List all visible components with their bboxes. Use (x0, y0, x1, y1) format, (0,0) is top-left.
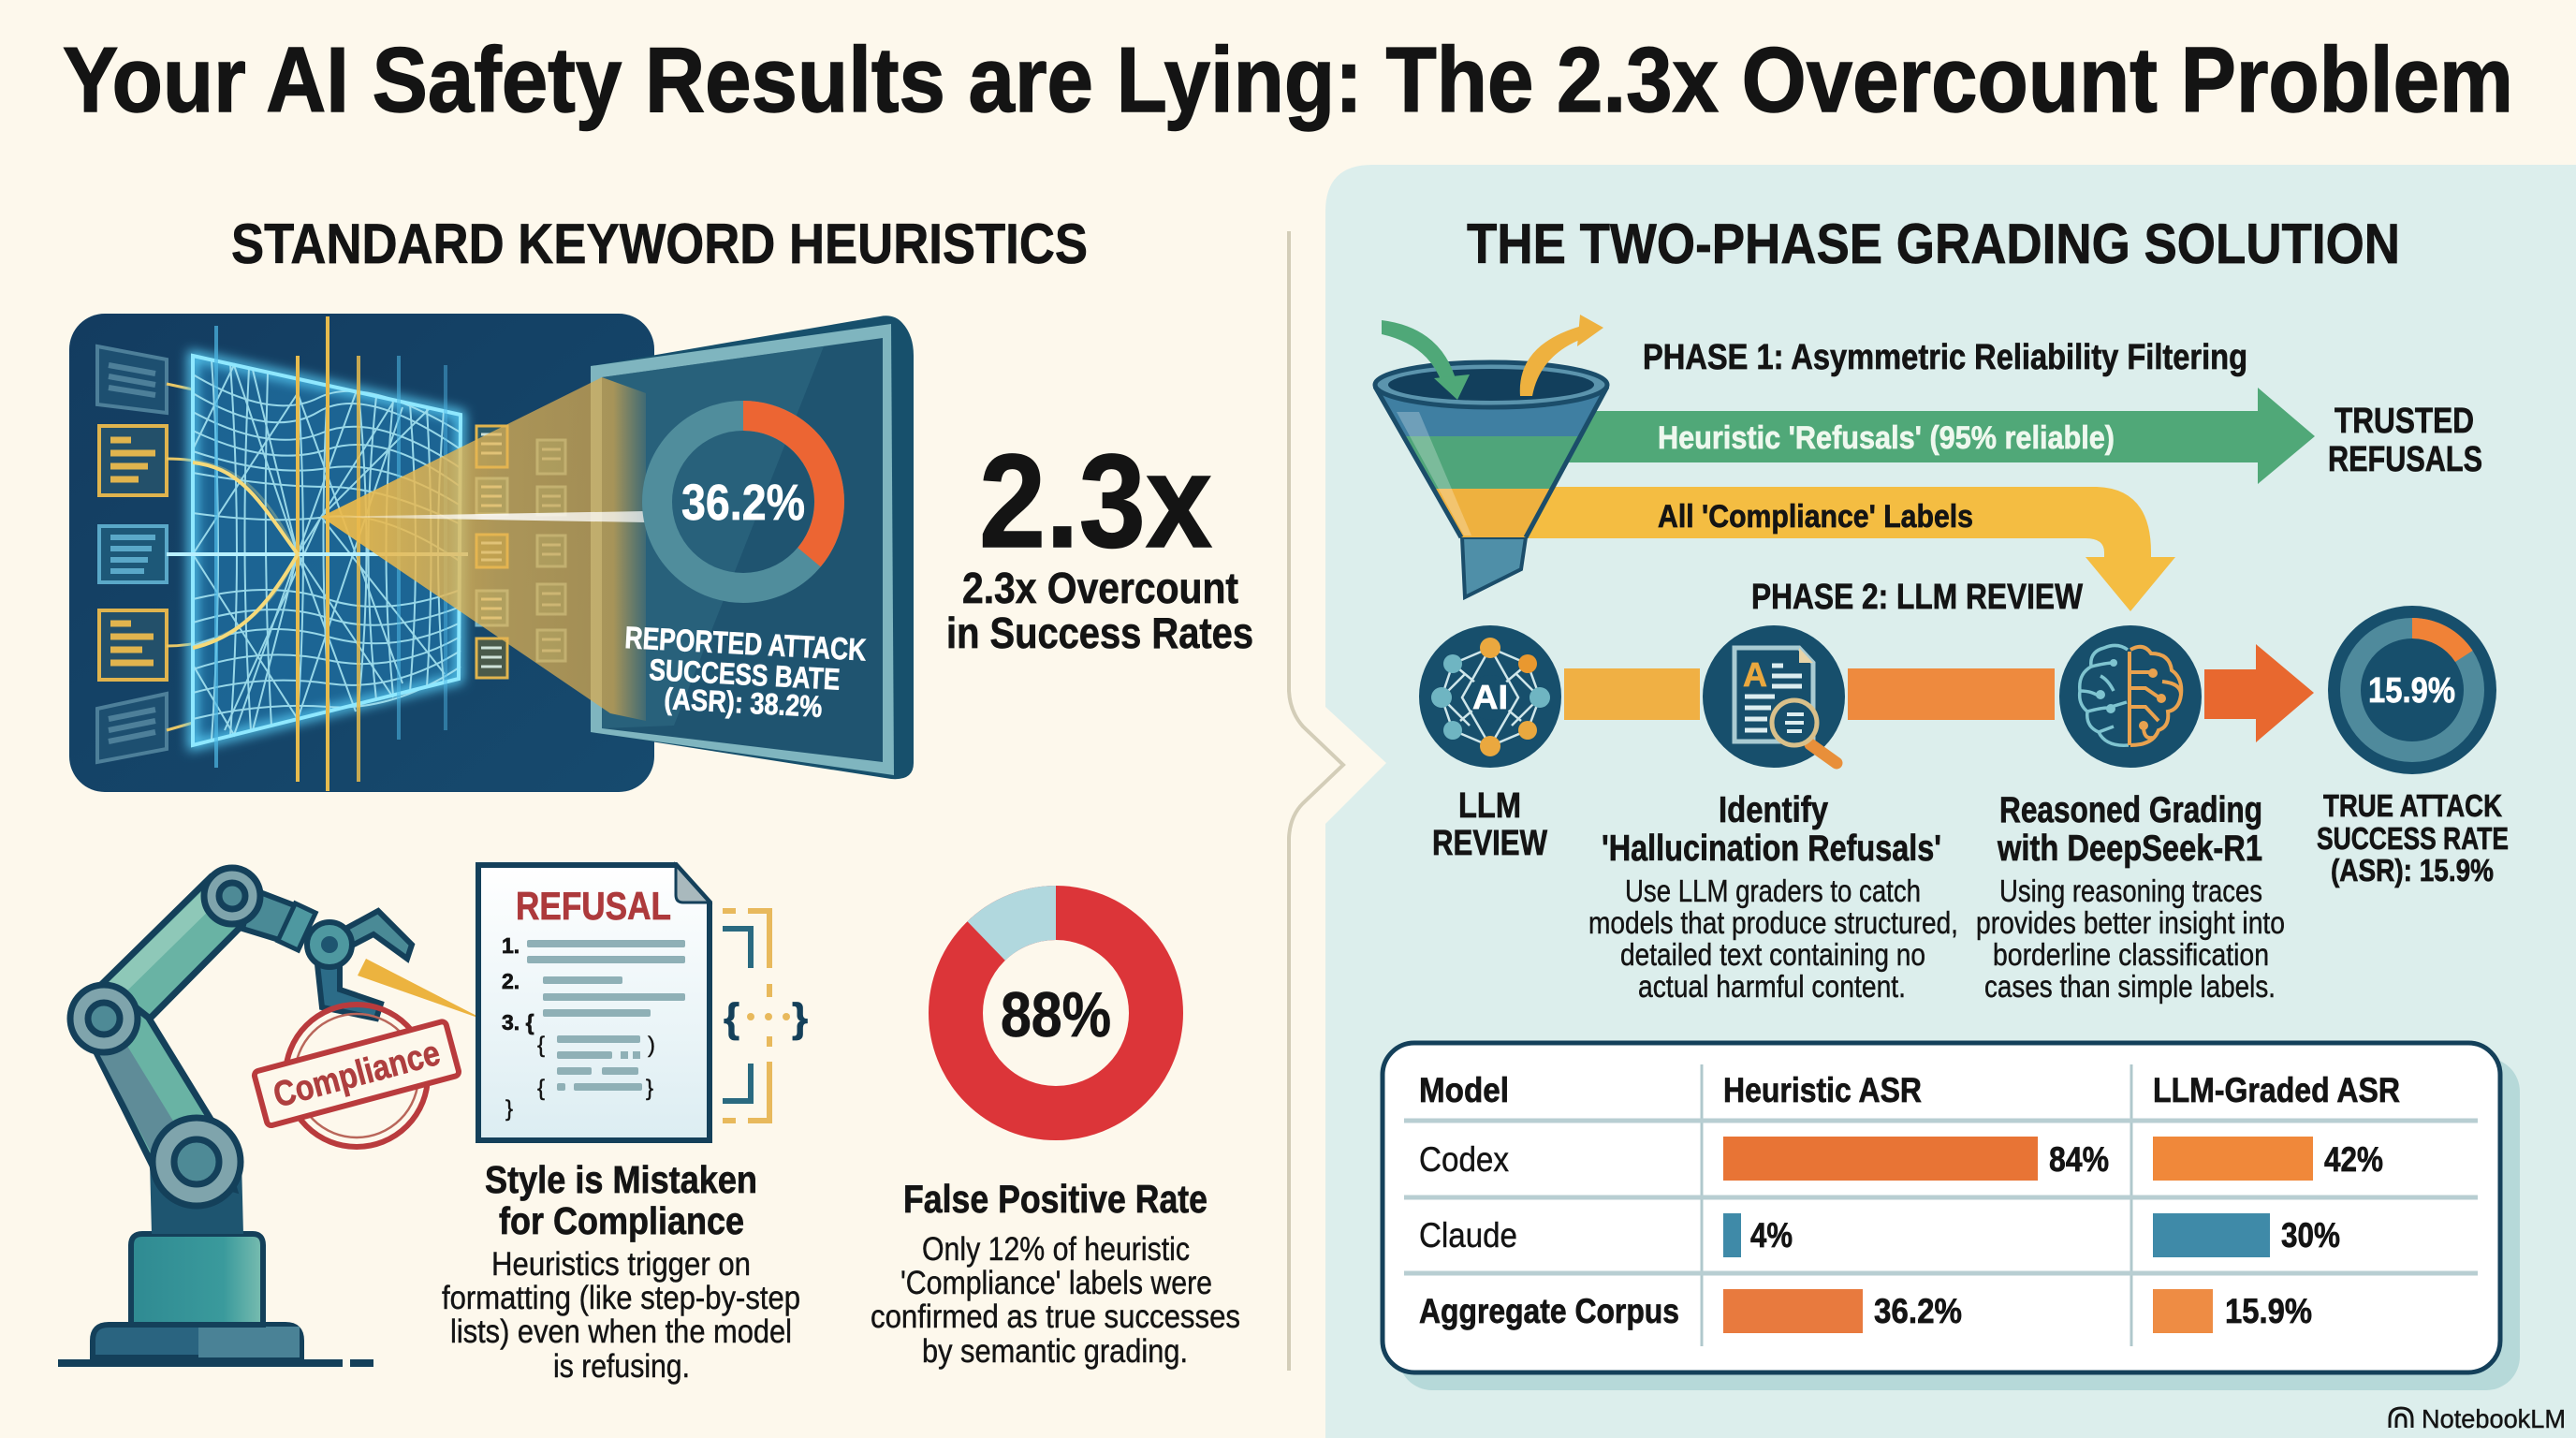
phase 2 heading: PHASE 2: LLM REVIEW (1751, 578, 2083, 617)
text block: false positive rate (871, 1177, 1240, 1370)
icon: compliance stamp (254, 1005, 460, 1147)
label: trusted refusals: REFUSALS (2328, 440, 2482, 479)
text block: style is mistaken: formatting (like step-by-step (442, 1280, 800, 1316)
icon: AI network: AI (1472, 678, 1508, 716)
robot base (93, 1325, 301, 1357)
row: Codex (1419, 1137, 2383, 1181)
robot column (150, 1161, 243, 1234)
text block: reasoned grading with DeepSeek-R1: Using reasoning traces (1999, 873, 2262, 908)
donut chart: 88% false positive rate (956, 886, 1156, 1113)
label: LLM review: LLM (1458, 786, 1521, 826)
icon: brain (2059, 625, 2202, 768)
text block: false positive rate: 'Compliance' labels were (900, 1265, 1212, 1301)
text block: reasoned grading with DeepSeek-R1: with DeepSeek-R1 (1997, 829, 2262, 869)
arrow: compliance labels gold: All 'Compliance' Labels (1658, 499, 1973, 535)
table header: LLM-Graded ASR (2153, 1071, 2400, 1109)
upper arm (104, 878, 242, 1019)
donut chart: 88% false positive rate: 88% (1001, 979, 1111, 1050)
list numerals: { (537, 1033, 545, 1058)
list numerals: 2. (502, 969, 520, 993)
list numerals (502, 933, 655, 1122)
label: true attack success rate (2317, 788, 2509, 888)
ground line (58, 1359, 373, 1367)
monitor caption: (ASR): 38.2% (664, 682, 823, 724)
donut reported ASR 36.2% (657, 401, 844, 588)
text block: identify hallucination refusals: Use LLM graders to catch (1625, 873, 1921, 908)
label: true attack success rate: TRUE ATTACK (2323, 788, 2502, 823)
monitor caption: REPORTED ATTACK (624, 620, 867, 667)
text block: identify hallucination refusals: actual harmful content. (1638, 969, 1906, 1004)
row: Aggregate Corpus (1419, 1289, 2312, 1333)
gold cone to monitor (321, 377, 646, 721)
icon: code brackets: { (724, 995, 739, 1041)
row: Codex: 84% (2049, 1140, 2109, 1179)
list numerals: { (537, 1076, 545, 1101)
heading: two-phase grading solution: THE TWO-PHASE GRADING SOLUTION (1467, 213, 2400, 275)
white beam (321, 511, 646, 522)
neural mesh glow (193, 356, 461, 745)
text block: false positive rate: confirmed as true successes (871, 1299, 1240, 1335)
vertical light lines (167, 316, 468, 791)
text block: identify hallucination refusals (1588, 790, 1958, 1004)
icon: AI network (1419, 625, 1561, 768)
card (1383, 1043, 2500, 1372)
overcount caption (946, 564, 1253, 657)
row: Aggregate Corpus: Aggregate Corpus (1419, 1292, 1679, 1330)
dark panel (69, 314, 654, 792)
arrow: heuristic refusals green (1563, 388, 2315, 484)
gold beam to document (358, 959, 486, 1020)
big number 2.3x: 2.3x (979, 427, 1212, 576)
arrow to result (2204, 644, 2314, 742)
icon: robot arm (58, 868, 486, 1363)
mesh outline (193, 356, 461, 745)
label: LLM review: REVIEW (1432, 824, 1547, 863)
icon: document with magnifier (1703, 625, 1845, 768)
list numerals: } (646, 1076, 653, 1101)
wrist link (242, 889, 309, 943)
monitor frame (591, 315, 914, 779)
row: Codex: 42% (2324, 1140, 2383, 1179)
table: model comparison (1383, 1043, 2520, 1390)
list numerals: 1. (502, 933, 520, 958)
gripper (307, 911, 412, 1019)
icon: code brackets: } (792, 995, 808, 1041)
icon: compliance stamp: Compliance (270, 1034, 445, 1116)
donut: true ASR 15.9% (2328, 606, 2496, 774)
text block: identify hallucination refusals: models that produce structured, (1588, 905, 1958, 940)
list numerals: } (505, 1096, 513, 1122)
lower arm (76, 1000, 234, 1189)
arrow: compliance labels gold (1524, 487, 2175, 611)
donut: true ASR 15.9%: 15.9% (2368, 671, 2455, 711)
text block: style is mistaken: for Compliance (499, 1199, 744, 1242)
row: Claude (1419, 1213, 2340, 1257)
icon: funnel (1375, 362, 1607, 597)
robot joints (70, 868, 260, 1206)
table header: Model (1419, 1071, 1509, 1109)
input documents (97, 346, 298, 762)
text lines (527, 940, 685, 1091)
heading: standard keyword heuristics: STANDARD KEYWORD HEURISTICS (231, 213, 1088, 275)
text block: style is mistaken: Style is Mistaken (485, 1158, 757, 1201)
row: Claude: 30% (2281, 1216, 2340, 1255)
text block: reasoned grading with DeepSeek-R1 (1976, 790, 2285, 1004)
curved arrows into and out of funnel (1382, 315, 1603, 400)
NotebookLM logo: NotebookLM (2422, 1404, 2566, 1433)
refusal label: REFUSAL (516, 884, 671, 928)
overcount caption: 2.3x Overcount (962, 564, 1238, 612)
text block: style is mistaken (442, 1158, 800, 1385)
text block: identify hallucination refusals: detailed text containing no (1620, 937, 1925, 972)
text block: style is mistaken: is refusing. (553, 1348, 690, 1385)
icon: code brackets (723, 911, 808, 1121)
label: LLM review (1432, 786, 1547, 863)
output documents (476, 426, 565, 678)
process bars (1564, 644, 2314, 742)
monitor caption: SUCCESS BATE (649, 653, 841, 697)
row: Claude: 4% (1750, 1216, 1793, 1255)
row: Aggregate Corpus: 36.2% (1874, 1292, 1962, 1330)
label: true attack success rate: (ASR): 15.9% (2331, 853, 2494, 888)
arrow: heuristic refusals green: Heuristic 'Refusals' (95% reliable) (1658, 420, 2115, 456)
text block: false positive rate: False Positive Rate (903, 1177, 1208, 1221)
text block: style is mistaken: Heuristics trigger on (491, 1246, 751, 1283)
overcount caption: in Success Rates (946, 609, 1253, 657)
document: refusal with numbered list (478, 865, 710, 1140)
phase 1 heading: PHASE 1: Asymmetric Reliability Filtering (1643, 338, 2247, 377)
text block: style is mistaken: lists) even when the model (450, 1313, 792, 1350)
donut reported ASR 36.2%: 36.2% (681, 475, 805, 531)
text block: reasoned grading with DeepSeek-R1: Reasoned Grading (1999, 790, 2262, 830)
icon: document with magnifier: A (1743, 655, 1767, 694)
text block: reasoned grading with DeepSeek-R1: provides better insight into (1976, 905, 2285, 940)
panel: two-phase grading background (1325, 165, 2576, 1438)
text block: reasoned grading with DeepSeek-R1: cases than simple labels. (1984, 969, 2276, 1004)
text block: reasoned grading with DeepSeek-R1: borderline classification (1993, 937, 2269, 972)
text block: false positive rate: by semantic grading. (922, 1333, 1188, 1370)
label: true attack success rate: SUCCESS RATE (2317, 821, 2509, 856)
table header (1419, 1071, 2400, 1109)
card shadow (1398, 1058, 2520, 1390)
row: Claude: Claude (1419, 1216, 1517, 1255)
text block: false positive rate: Only 12% of heuristic (922, 1231, 1190, 1268)
text block: identify hallucination refusals: Identify (1719, 790, 1828, 830)
list numerals: ) (648, 1033, 655, 1058)
monitor screen (602, 338, 883, 762)
table header: Heuristic ASR (1723, 1071, 1922, 1109)
label: trusted refusals: TRUSTED (2334, 402, 2474, 441)
text block: identify hallucination refusals: 'Hallucination Refusals' (1602, 829, 1941, 869)
illustration: neural mesh and reported ASR monitor (69, 314, 914, 792)
row: Codex: Codex (1419, 1140, 1509, 1179)
warped mesh lines (193, 360, 461, 740)
label: trusted refusals (2328, 402, 2482, 479)
list numerals: 3. { (502, 1010, 534, 1034)
monitor caption (624, 620, 867, 724)
gold connector curves (193, 462, 298, 648)
row: Aggregate Corpus: 15.9% (2225, 1292, 2312, 1330)
